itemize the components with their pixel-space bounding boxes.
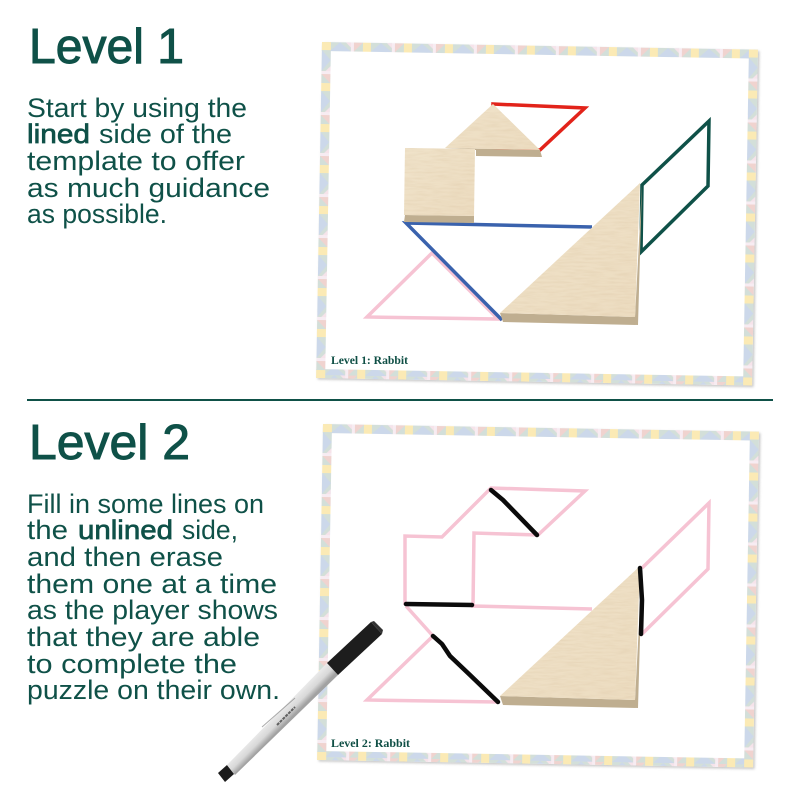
panel: Level 2 template card (317, 424, 760, 769)
panel: Level 1 template card (316, 42, 759, 387)
text block: Level 2 instructions: side, (182, 515, 238, 545)
text block: Level 2 instructions: Fill in some lines on (27, 489, 264, 519)
caption: Level 1 Rabbit: Level 1: Rabbit (331, 353, 408, 367)
wood piece: large triangle (500, 566, 642, 708)
text block: Level 2 instructions: them one at a time (27, 569, 277, 599)
text block: Level 1 instructions: as much guidance (27, 173, 270, 203)
text block: Level 2 instructions: the (27, 515, 68, 545)
wood piece: small triangle (445, 104, 542, 157)
text block: Level 1 instructions (27, 93, 270, 229)
text block: Level 2 instructions: as the player shows (27, 595, 278, 625)
text block: Level 2 instructions: that they are able (27, 622, 260, 652)
text block: Level 2 instructions (27, 489, 280, 705)
heading: Level 2: Level 2 (29, 416, 190, 470)
text block: Level 2 instructions: unlined (78, 515, 173, 545)
text block: Level 2 instructions: and then erase (27, 542, 223, 572)
text block: Level 1 instructions: lined (27, 119, 90, 149)
heading: Level 1: Level 1 (29, 20, 184, 74)
shape outline: red parallelogram (493, 104, 585, 150)
icon: dry-erase marker (218, 621, 383, 782)
shape outline: pink triangle (367, 253, 498, 319)
text block: Level 2 instructions: puzzle on their own. (27, 675, 280, 705)
wood piece: large triangle (500, 183, 642, 325)
caption: Level 2 Rabbit: Level 2: Rabbit (331, 736, 410, 750)
shape outline: green parallelogram (641, 121, 709, 252)
text block: Level 2 instructions: to complete the (27, 649, 237, 679)
rabbit outline: pink lines (367, 488, 709, 702)
text block: Level 1 instructions: as possible. (27, 199, 167, 229)
divider (27, 399, 773, 401)
text block: Level 1 instructions: template to offer (27, 146, 245, 176)
text block: Level 1 instructions: side of the (99, 119, 232, 149)
marker drawn lines: black (406, 490, 642, 702)
shape outline: blue triangle (406, 223, 592, 320)
wood piece: square (404, 148, 475, 223)
text block: Level 1 instructions: Start by using the (27, 93, 247, 123)
